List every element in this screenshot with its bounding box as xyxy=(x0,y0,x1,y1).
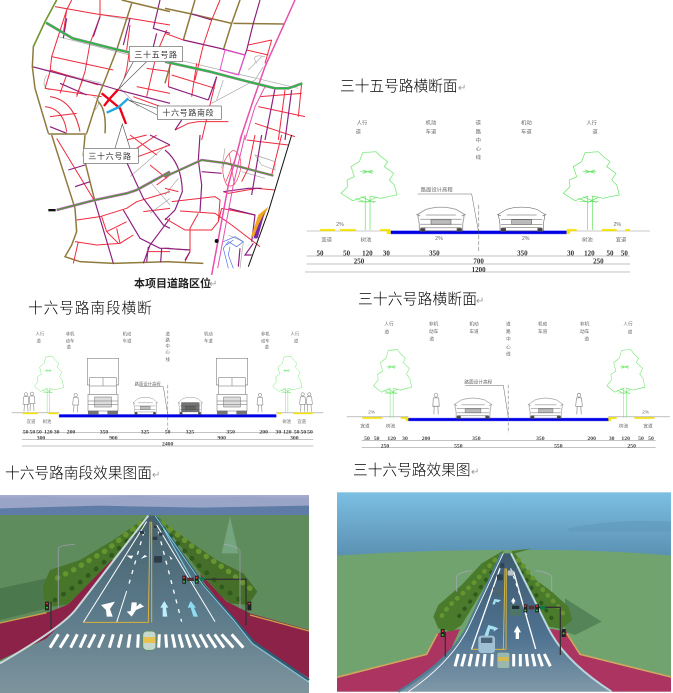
column labels: 心 xyxy=(476,146,482,153)
dimension lines and numbers: 350 xyxy=(517,249,528,257)
column labels: 道 xyxy=(592,127,598,135)
dimension lines and numbers: 325 xyxy=(141,430,149,436)
ground and pavement xyxy=(347,385,670,433)
red verges xyxy=(0,560,309,678)
icon: right tree xyxy=(607,350,645,418)
column labels: 动车 xyxy=(429,328,439,335)
column labels: 宜道 xyxy=(27,418,36,425)
column labels: 线 xyxy=(506,351,511,357)
column labels: 2% xyxy=(613,222,621,228)
column labels: 动车 xyxy=(580,328,590,335)
column labels: 人行 xyxy=(36,331,45,338)
column labels: 路 xyxy=(476,127,482,135)
map: north-west quadrant roads xyxy=(32,0,170,134)
map: south-west quadrant roads xyxy=(48,135,170,263)
dimension lines and numbers: 50 xyxy=(364,436,370,442)
column labels: 车道 xyxy=(426,127,437,135)
crosswalk xyxy=(50,634,243,648)
column labels: 车道 xyxy=(469,328,479,335)
column labels: 非机 xyxy=(429,321,439,328)
map caption: 本项目道路区位 xyxy=(134,276,211,290)
signal pole and lamps xyxy=(445,571,560,657)
column labels: 宜道 xyxy=(297,418,307,425)
column labels: 机动 xyxy=(469,321,479,328)
column labels: 道 xyxy=(506,321,511,328)
dimension lines and numbers: 120 xyxy=(621,436,630,442)
column labels: 2% xyxy=(336,222,344,228)
callout: road 36: 三十六号路 xyxy=(88,151,132,161)
column labels: 宜道 xyxy=(643,423,653,430)
column labels: 人行 xyxy=(384,321,394,328)
median island xyxy=(143,631,156,650)
column labels: 道 xyxy=(584,335,589,342)
column labels: 非机 xyxy=(261,331,270,338)
dimension lines and numbers: 350 xyxy=(226,430,235,436)
column labels: 非机 xyxy=(580,321,590,328)
column labels: 非机 xyxy=(66,331,75,338)
column labels: 道 xyxy=(476,118,482,126)
signal pole and street lamps xyxy=(51,544,246,629)
icon: left tree xyxy=(34,356,64,413)
column labels: 车道 xyxy=(204,337,213,344)
dimension lines and numbers: 30 xyxy=(54,430,60,436)
column labels: 人行 xyxy=(586,118,598,126)
column labels: 人行 xyxy=(291,331,300,338)
dimension lines and numbers: 350 xyxy=(429,249,440,257)
dimension lines and numbers: 300 xyxy=(37,435,45,441)
column labels: 人行 xyxy=(357,118,368,126)
grass xyxy=(337,550,671,692)
column labels: 树池 xyxy=(43,418,52,425)
dimension lines and numbers: 50 xyxy=(294,430,300,436)
icon: right car xyxy=(528,398,563,419)
dimension lines and numbers: 120 xyxy=(387,436,396,442)
sky and mountains xyxy=(0,495,309,516)
cars xyxy=(478,563,521,653)
icon: left truck xyxy=(87,358,119,414)
curbs xyxy=(0,516,309,682)
dimension lines and numbers: 250 xyxy=(627,443,636,449)
column labels xyxy=(27,331,307,425)
column labels: 道 xyxy=(356,127,362,135)
dimension lines and numbers: 50 xyxy=(374,436,380,442)
light beam xyxy=(222,517,238,553)
crosswalk xyxy=(455,654,550,666)
dimension lines and numbers: 120 xyxy=(44,430,53,436)
red verges xyxy=(337,628,671,692)
roadside hedges xyxy=(43,516,257,607)
dimension lines and numbers: 50 xyxy=(23,430,29,436)
callout: road 36 xyxy=(83,124,138,163)
icon: pedestrians xyxy=(23,392,312,412)
column labels: 路面设计高程 xyxy=(421,185,453,193)
column labels: 宜道 xyxy=(616,235,627,243)
column labels: 2% xyxy=(522,236,530,242)
column labels: 2% xyxy=(642,410,649,415)
column labels: 树池 xyxy=(582,235,593,243)
dimension lines and numbers: 50 xyxy=(607,249,614,257)
dimension lines and numbers: 50 xyxy=(30,430,35,436)
map: green corridor of road 35 xyxy=(46,23,170,62)
column labels: 机动 xyxy=(123,331,132,338)
dimension lines and numbers: 50 xyxy=(648,436,654,442)
icon: right tree xyxy=(273,356,302,413)
column labels: 树池 xyxy=(361,235,372,243)
dimension lines and numbers: 1200 xyxy=(472,266,486,274)
column labels: 机动 xyxy=(426,118,437,126)
dimension lines and numbers: 30 xyxy=(383,249,390,257)
callout: road 16 south xyxy=(128,100,221,119)
dimension lines and numbers xyxy=(305,249,630,274)
column labels: 树池 xyxy=(282,418,292,425)
column labels: 道 xyxy=(37,337,42,344)
icon: left car xyxy=(133,397,158,415)
road surface xyxy=(398,553,612,692)
callout: road 16 south: 十六号路南段 xyxy=(162,108,214,118)
column labels: 机动 xyxy=(521,118,532,126)
column labels xyxy=(321,118,627,243)
map: highlighted project roads xyxy=(102,89,128,124)
dimension lines and numbers: 550 xyxy=(554,443,563,449)
heading: road 16 south rendering: 十六号路南段效果图面 xyxy=(5,465,152,482)
column labels: 道 xyxy=(294,337,299,344)
heading: road 36 cross-section: ↵ xyxy=(476,296,484,307)
column labels: 心 xyxy=(506,343,511,349)
dimension lines and numbers xyxy=(22,430,313,448)
column labels: 道 xyxy=(384,329,389,336)
column labels: 道 xyxy=(166,331,171,338)
icon: left car xyxy=(416,207,466,231)
heading: road 36 rendering: 三十六号路效果图 xyxy=(353,462,471,479)
dimension lines and numbers: 250 xyxy=(381,443,389,449)
lane markings xyxy=(471,568,536,650)
column labels: 动车 xyxy=(261,337,270,344)
tree shadow on grass xyxy=(565,598,602,635)
dimension lines and numbers xyxy=(362,436,656,449)
column labels xyxy=(360,321,653,430)
heading: road 35 cross-section: 三十五号路横断面 xyxy=(340,78,458,95)
dimension lines and numbers: 200 xyxy=(422,436,430,442)
icon: cyclists xyxy=(433,393,582,414)
dimension lines and numbers: 300 xyxy=(290,435,299,441)
column labels: 机动 xyxy=(204,331,213,338)
dimension lines and numbers: 550 xyxy=(454,443,463,449)
dimension lines and numbers: 30 xyxy=(567,249,575,257)
ground and pavement xyxy=(12,385,323,430)
column labels: 车道 xyxy=(521,127,532,135)
dimension lines and numbers: 50 xyxy=(301,430,306,436)
dimension lines and numbers: 50 xyxy=(638,436,644,442)
dimension lines and numbers: 50 xyxy=(36,430,42,436)
panel: road 16 south rendering xyxy=(0,495,309,693)
dimension lines and numbers: 30 xyxy=(402,436,408,442)
heading: road 16 south cross-section: 十六号路南段横断 xyxy=(28,300,153,317)
map: south-east quadrant roads xyxy=(165,135,292,275)
column labels: 车道 xyxy=(538,328,548,335)
dimension lines and numbers: 120 xyxy=(362,249,373,257)
column labels: 路面设计高程 xyxy=(464,379,493,386)
column labels: 心 xyxy=(166,349,171,355)
dimension lines and numbers: 50 xyxy=(343,249,351,257)
column labels: 线 xyxy=(166,356,171,362)
dimension lines and numbers: 2400 xyxy=(162,442,173,448)
dimension lines and numbers: 120 xyxy=(283,430,292,436)
icon: right car xyxy=(178,397,203,415)
panel: road 36 cross-section xyxy=(347,321,670,449)
dimension lines and numbers: 250 xyxy=(354,258,365,266)
column labels: 道 xyxy=(628,329,633,336)
curbs xyxy=(398,553,612,692)
distant cars xyxy=(140,526,163,563)
pavement arrows xyxy=(101,555,198,617)
column labels: 中 xyxy=(166,343,170,350)
heading: road 36 cross-section: 三十六号路横断面 xyxy=(358,291,477,308)
callout: road 35 xyxy=(118,47,183,89)
column labels: 树池 xyxy=(386,423,396,430)
map: north-east quadrant roads xyxy=(165,0,305,140)
icon: left tree xyxy=(341,152,397,230)
dimension lines and numbers: 50 xyxy=(621,249,628,257)
column labels: 2% xyxy=(368,410,375,415)
column labels: 路 xyxy=(166,337,171,344)
panel: road 16 south cross-section xyxy=(12,331,323,448)
dimension lines and numbers: 900 xyxy=(109,435,118,441)
column labels: 人行 xyxy=(623,321,633,328)
column labels: 车道 xyxy=(123,337,132,344)
icon: right tree xyxy=(563,152,619,230)
icon: left car xyxy=(454,398,492,419)
dimension lines and numbers: 350 xyxy=(472,436,481,442)
lane markings xyxy=(83,522,215,622)
callout: road 35: 三十五号路 xyxy=(134,49,178,59)
column labels: 路 xyxy=(506,328,511,335)
road surface xyxy=(0,516,309,693)
column labels: 线 xyxy=(476,153,482,161)
column labels: 宜道 xyxy=(360,423,370,430)
column labels: 中 xyxy=(506,335,511,342)
map caption: ↵ xyxy=(209,279,217,290)
median island xyxy=(497,653,509,668)
column labels: 宜道 xyxy=(321,235,333,243)
column labels: 道 xyxy=(264,343,269,350)
dimension lines and numbers: 50 xyxy=(317,249,324,257)
dimension lines and numbers: 700 xyxy=(473,258,484,266)
traffic lights xyxy=(441,604,566,637)
heading: road 35 cross-section: ↵ xyxy=(458,83,466,94)
dimension lines and numbers: 325 xyxy=(186,430,194,436)
dimension lines and numbers: 30 xyxy=(609,436,615,442)
dimension lines and numbers: 200 xyxy=(587,436,596,442)
column labels: 路面设计高程 xyxy=(135,380,161,387)
dimension lines and numbers: 50 xyxy=(307,430,313,436)
dimension lines and numbers: 50 xyxy=(165,430,171,436)
icon: right truck xyxy=(216,358,248,414)
column labels: 道 xyxy=(429,335,434,342)
dimension lines and numbers: 30 xyxy=(276,430,281,436)
column labels: 机动 xyxy=(538,321,548,328)
grass xyxy=(0,515,309,662)
heading: road 36 rendering: ↵ xyxy=(471,467,479,478)
panel: road 35 cross-section xyxy=(305,118,650,274)
icon: left tree xyxy=(374,350,412,418)
icon: right car xyxy=(497,207,546,231)
heading: road 16 south rendering: ↵ xyxy=(152,470,160,481)
dimension lines and numbers: 900 xyxy=(217,435,226,441)
dimension lines and numbers: 250 xyxy=(593,258,604,266)
dimension lines and numbers: 350 xyxy=(536,436,545,442)
panel: road location map xyxy=(32,0,305,275)
ground and pavement xyxy=(307,205,650,252)
column labels: 2% xyxy=(435,236,443,242)
dimension lines and numbers: 350 xyxy=(100,430,108,436)
column labels: 树池 xyxy=(619,423,629,430)
dimension lines and numbers: 200 xyxy=(67,430,75,436)
panel: road 36 rendering xyxy=(337,492,671,692)
shadows on grass xyxy=(0,578,47,620)
roadside hedges xyxy=(433,548,572,632)
column labels: 中 xyxy=(476,136,481,144)
dimension lines and numbers: 120 xyxy=(584,249,595,257)
dimension lines and numbers: 200 xyxy=(259,430,268,436)
pavement arrows xyxy=(484,598,521,639)
column labels: 道 xyxy=(67,343,72,350)
sky xyxy=(337,492,671,557)
traffic lights xyxy=(45,576,251,610)
column labels: 动车 xyxy=(66,337,75,344)
